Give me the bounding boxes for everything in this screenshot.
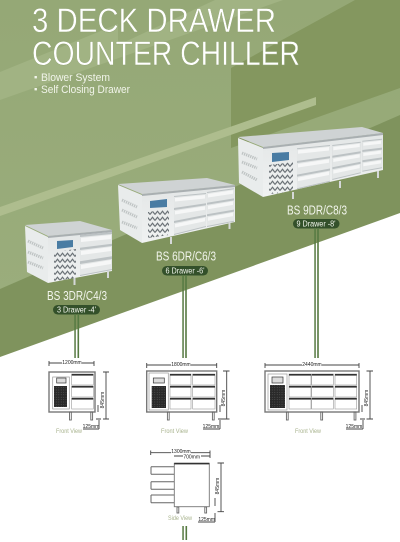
badge: 6 Drawer -6': 6 Drawer -6'	[166, 267, 205, 276]
technical drawing: 1200mm front view	[49, 360, 109, 435]
product photo: 6 drawer chiller	[118, 178, 235, 244]
label: BS 9DR/C8/3: BS 9DR/C8/3	[287, 203, 347, 217]
label: BS 3DR/C4/3: BS 3DR/C4/3	[47, 289, 107, 303]
technical drawing: side view: 845mm	[215, 478, 221, 494]
technical drawing: 2440mm front view: 2440mm	[302, 362, 322, 368]
technical drawing: 1200mm front view: 125mm	[83, 424, 99, 430]
technical drawing: 2440mm front view: 845mm	[364, 390, 370, 406]
technical drawing: 1800mm front view	[147, 362, 230, 435]
technical drawing: 1800mm front view: 1800mm	[171, 362, 191, 368]
label: BS 6DR/C6/3: BS 6DR/C6/3	[156, 250, 216, 264]
technical drawing: 2440mm front view: Front View	[295, 428, 321, 435]
feature list: Blower System	[41, 72, 110, 84]
technical drawing: 1800mm front view: 845mm	[221, 390, 227, 406]
feature list: Self Closing Drawer	[41, 84, 130, 96]
connector: 9 drawer	[314, 228, 319, 358]
technical drawing: side view	[151, 449, 224, 523]
technical drawing: side view: 700mm	[183, 454, 200, 460]
technical drawing: side view: 125mm	[198, 517, 215, 523]
product photo: 3 drawer chiller	[25, 221, 112, 285]
technical drawing: 1800mm front view: Front View	[161, 428, 188, 435]
technical drawing: 1200mm front view: 1200mm	[62, 360, 82, 366]
badge: 3 Drawer -4': 3 Drawer -4'	[57, 306, 96, 315]
technical drawing: 1800mm front view: 125mm	[203, 424, 219, 430]
connector: side view	[182, 526, 187, 540]
product photo: 9 drawer chiller	[238, 127, 383, 199]
technical drawing: side view: Side View	[168, 515, 192, 522]
connector: 3 drawer	[74, 314, 79, 358]
title: COUNTER CHILLER	[32, 35, 300, 73]
technical drawing: 1200mm front view: Front View	[56, 428, 82, 435]
technical drawing: 2440mm front view	[265, 362, 373, 435]
technical drawing: 1200mm front view: 845mm	[100, 392, 106, 408]
title	[32, 2, 300, 73]
technical drawing: 2440mm front view: 125mm	[346, 424, 362, 430]
feature list	[34, 72, 130, 96]
technical drawing: side view: 1300mm	[171, 449, 191, 455]
connector: 6 drawer	[182, 275, 187, 358]
title: 3 DECK DRAWER	[32, 2, 276, 40]
badge: 9 Drawer -8': 9 Drawer -8'	[296, 220, 336, 229]
